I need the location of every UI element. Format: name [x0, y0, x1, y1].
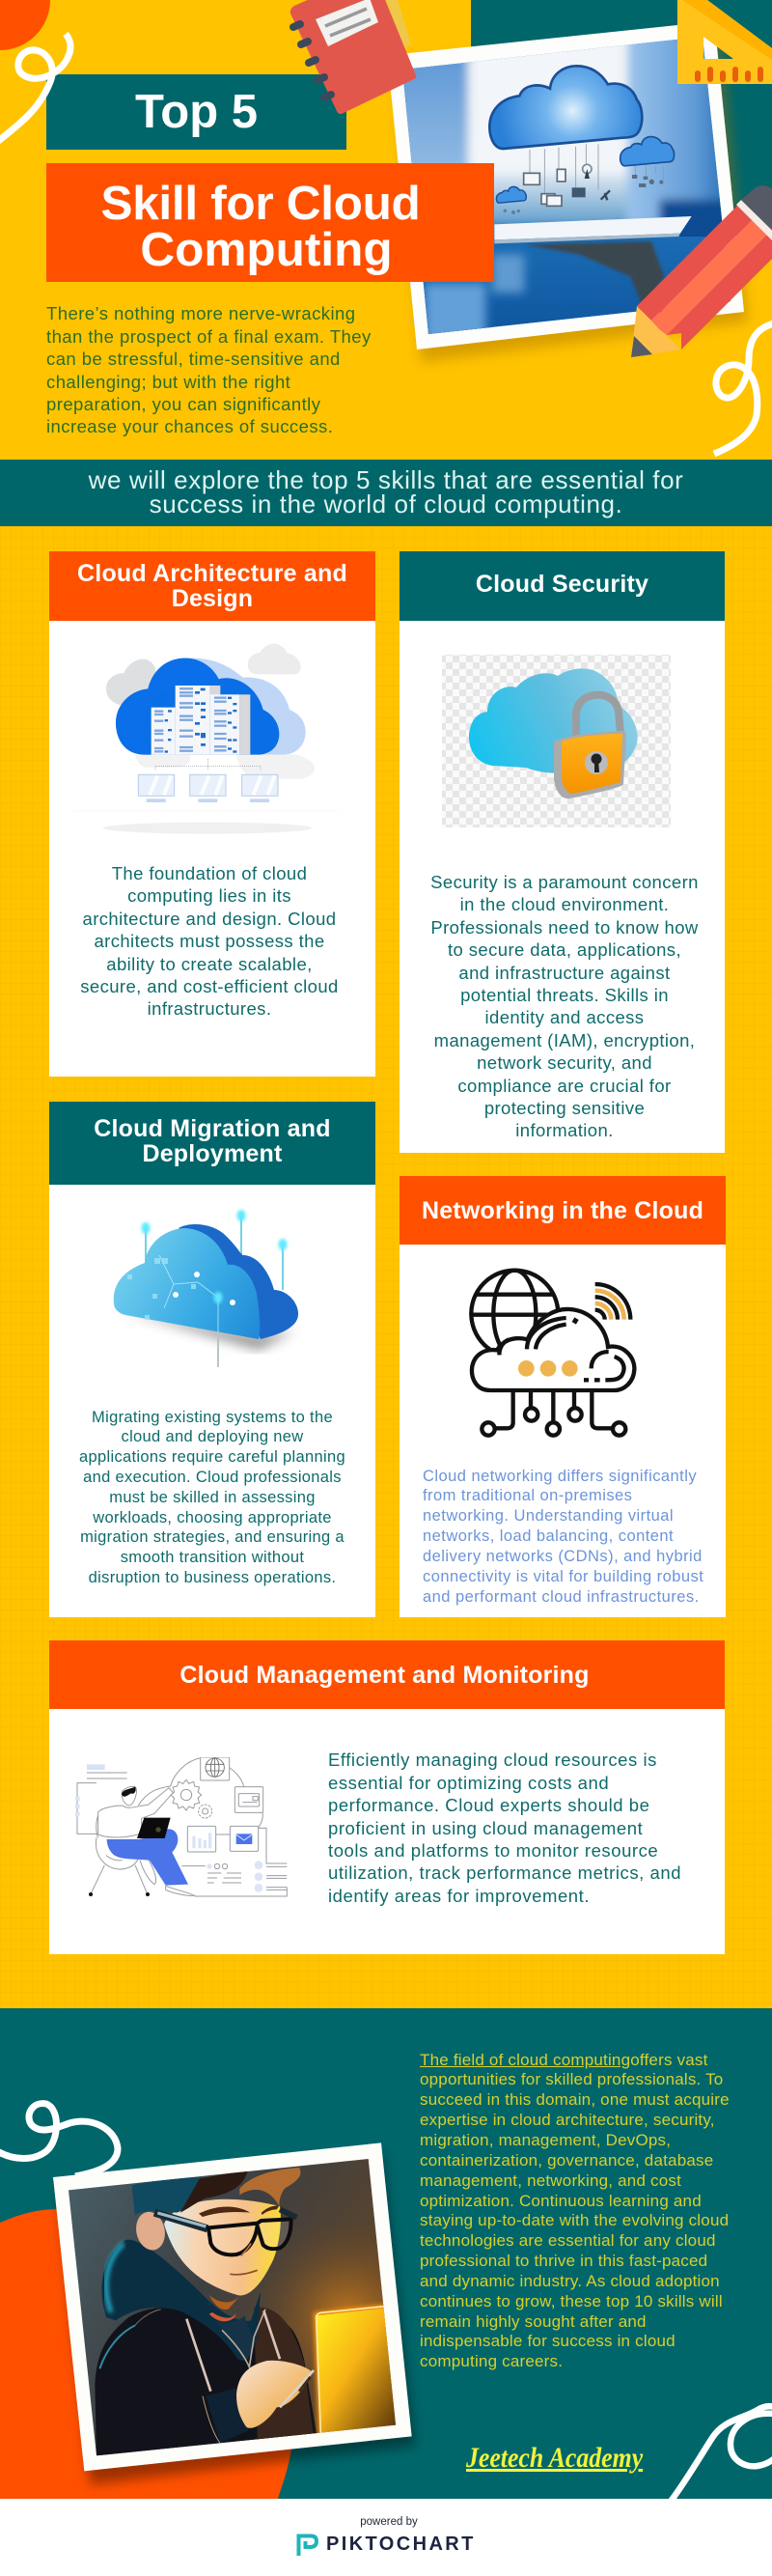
panel: Cloud Security	[400, 551, 725, 1153]
closing paragraph: The field of cloud computingoffers vast	[420, 2051, 708, 2069]
text: architecture description: architecture and design. Cloud	[83, 909, 336, 929]
text: migration description: disruption to business operations.	[89, 1569, 336, 1586]
icon: cloud network globe	[469, 1269, 637, 1438]
heading: Cloud Architecture and Design: Cloud Architecture and	[77, 560, 347, 587]
closing paragraph: remain highly sought after and	[420, 2312, 647, 2331]
text: architecture description	[80, 863, 339, 1019]
text: management description: utilization, track performance metrics, and	[328, 1862, 681, 1883]
heading: Networking in the Cloud	[400, 1176, 726, 1245]
text: management description: essential for optimizing costs and	[328, 1773, 609, 1793]
text: migration description: cloud and deploying new	[122, 1428, 303, 1445]
heading: Cloud Migration and Deployment: Cloud Migration and	[94, 1114, 331, 1141]
closing paragraph: computing careers.	[420, 2352, 563, 2370]
illustration: person with laptop and dashboards	[75, 1757, 288, 1896]
text: migration description	[79, 1409, 345, 1586]
closing paragraph: indispensable for success in cloud	[420, 2332, 676, 2350]
text: networking description: networking. Understanding virtual	[423, 1507, 674, 1525]
decorative white scribble bottom left	[0, 2100, 122, 2175]
logo: Piktochart wordmark: PIKTOCHART	[326, 2534, 476, 2555]
panel: Cloud Migration and Deployment	[49, 1102, 375, 1617]
orange blob behind portrait	[0, 2209, 291, 2499]
text: powered by: powered by	[360, 2516, 418, 2528]
signature: Jeetech Academy: Jeetech Academy	[466, 2442, 643, 2474]
teal corner block	[471, 0, 772, 237]
heading: Networking in the Cloud: Networking in the Cloud	[422, 1197, 703, 1224]
closing paragraph: and dynamic industry. As cloud adoption	[420, 2272, 720, 2290]
panel: Cloud Architecture and Design	[49, 551, 375, 1077]
orange corner circle	[0, 0, 50, 50]
title box: Top 5: Top 5	[135, 86, 258, 138]
closing paragraph: professional to thrive in this fast-paced	[420, 2252, 707, 2270]
text: networking description: Cloud networking differs significantly	[423, 1468, 697, 1485]
text: security description: protecting sensitive	[484, 1098, 645, 1118]
text: management description: proficient in using cloud management	[328, 1818, 643, 1838]
text: architecture description: The foundation of cloud	[112, 863, 307, 883]
title box: Skill for Cloud Computing: Skill for Cloud	[100, 177, 421, 230]
heading: Cloud Security	[400, 551, 725, 621]
closing paragraph: continues to grow, these top 10 skills will	[420, 2292, 723, 2310]
logo: Piktochart icon	[297, 2534, 318, 2556]
text: architecture description: architects must possess the	[94, 931, 325, 951]
text: migration description: smooth transition without	[121, 1549, 304, 1566]
text: networking description: delivery networks (CDNs), and hybrid	[423, 1548, 703, 1565]
text: management description: identify areas for improvement.	[328, 1886, 590, 1906]
intro paragraph: There’s nothing more nerve-wracking	[46, 303, 355, 323]
closing paragraph	[420, 2051, 730, 2370]
decorative white scribble top left	[0, 31, 74, 145]
closing paragraph: optimization. Continuous learning and	[420, 2192, 702, 2209]
text: architecture description: infrastructures.	[148, 998, 271, 1019]
intro paragraph: can be stressful, time-sensitive and	[46, 349, 341, 369]
heading: Cloud Migration and Deployment	[49, 1102, 375, 1185]
text: security description: potential threats. Skills in	[460, 985, 669, 1005]
intro paragraph: increase your chances of success.	[46, 416, 333, 436]
intro paragraph	[46, 303, 372, 436]
portrait photo: boy with glasses and glowing tablet	[52, 2142, 419, 2491]
closing paragraph: staying up-to-date with the evolving cloud	[420, 2211, 729, 2229]
heading: Cloud Management and Monitoring	[49, 1640, 725, 1709]
background: grid panel	[0, 526, 772, 2008]
title box: Top 5	[46, 74, 346, 150]
panel: Networking in the Cloud	[400, 1176, 726, 1617]
text: architecture description: ability to create scalable,	[106, 954, 313, 974]
text: migration description: applications require careful planning	[79, 1448, 345, 1466]
text: migration description: must be skilled in assessing	[109, 1489, 316, 1506]
closing paragraph: management, networking, and cost	[420, 2171, 681, 2190]
decorative white scribble top right	[712, 321, 772, 458]
title box: Skill for Cloud Computing	[46, 163, 494, 282]
text: security description: network security, and	[477, 1052, 652, 1073]
closing paragraph: migration, management, DevOps,	[420, 2131, 671, 2149]
text: networking description: networks, load balancing, content	[423, 1527, 674, 1545]
text: migration description: migration strategies, and ensuring a	[80, 1528, 345, 1546]
closing paragraph: technologies are essential for any cloud	[420, 2231, 716, 2250]
text: management description: tools and platforms to monitor resource	[328, 1840, 658, 1861]
heading: Cloud Management and Monitoring: Cloud Management and Monitoring	[179, 1661, 590, 1688]
title box: Skill for Cloud Computing: Computing	[140, 223, 393, 276]
text: security description: to secure data, applications,	[448, 939, 681, 960]
text: networking description: and performant cloud infrastructures.	[423, 1588, 700, 1606]
text: migration description: Migrating existing systems to the	[92, 1409, 333, 1426]
closing paragraph: containerization, governance, database	[420, 2151, 713, 2170]
text: management description	[328, 1750, 681, 1906]
closing paragraph: succeed in this domain, one must acquire	[420, 2090, 730, 2109]
hero photo: cloud computing	[391, 25, 752, 366]
heading: Cloud Architecture and Design	[49, 551, 375, 621]
footer: powered by Piktochart	[0, 2499, 772, 2576]
heading: Cloud Migration and Deployment: Deployment	[142, 1139, 283, 1166]
panel: closing teal section	[0, 2008, 772, 2499]
text: management description: Efficiently managing cloud resources is	[328, 1750, 657, 1770]
text: architecture description: secure, and cost-efficient cloud	[80, 976, 339, 996]
text: security description: identity and access	[485, 1007, 644, 1027]
intro paragraph: than the prospect of a final exam. They	[46, 326, 372, 347]
icon: ruler triangle	[677, 0, 772, 84]
text: migration description: and execution. Cloud professionals	[83, 1469, 342, 1486]
text: security description: Security is a paramount concern	[430, 872, 699, 892]
icon: notebook	[290, 0, 417, 114]
text: management description: performance. Cloud experts should be	[328, 1795, 649, 1815]
text: security description: compliance are crucial for	[457, 1076, 672, 1096]
intro paragraph: challenging; but with the right	[46, 372, 290, 392]
text: networking description: connectivity is vital for building robust	[423, 1568, 703, 1585]
text: security description: information.	[515, 1120, 614, 1140]
closing paragraph: opportunities for skilled professionals. To	[420, 2070, 723, 2088]
heading: Cloud Architecture and Design: Design	[172, 585, 253, 612]
illustration: cloud servers	[103, 643, 315, 834]
banner: teal intro strip	[0, 460, 772, 526]
banner: teal intro strip: success in the world of cloud computing.	[150, 490, 622, 518]
illustration: cloud padlock on checker	[442, 655, 671, 827]
text: architecture description: computing lies in its	[127, 885, 291, 906]
text: security description: management (IAM), encryption,	[434, 1030, 695, 1050]
icon: pencil	[631, 185, 772, 357]
text: security description: Professionals need to know how	[430, 917, 699, 938]
illustration: isometric glowing cloud	[114, 1207, 299, 1367]
text: security description: and infrastructure against	[458, 963, 671, 983]
intro paragraph: preparation, you can significantly	[46, 394, 320, 414]
text: networking description	[423, 1468, 703, 1606]
text: migration description: workloads, choosing appropriate	[93, 1509, 332, 1526]
text: security description: in the cloud environment.	[460, 894, 669, 914]
panel: Cloud Management and Monitoring	[49, 1640, 725, 1954]
heading: Cloud Security: Cloud Security	[476, 571, 648, 598]
banner: teal intro strip: we will explore the top 5 skills that are essential for	[89, 465, 683, 494]
closing paragraph: expertise in cloud architecture, security,	[420, 2111, 715, 2129]
text: networking description: from traditional on-premises	[423, 1487, 632, 1504]
decorative white scribble bottom right	[669, 2402, 772, 2499]
text: security description	[430, 872, 699, 1140]
